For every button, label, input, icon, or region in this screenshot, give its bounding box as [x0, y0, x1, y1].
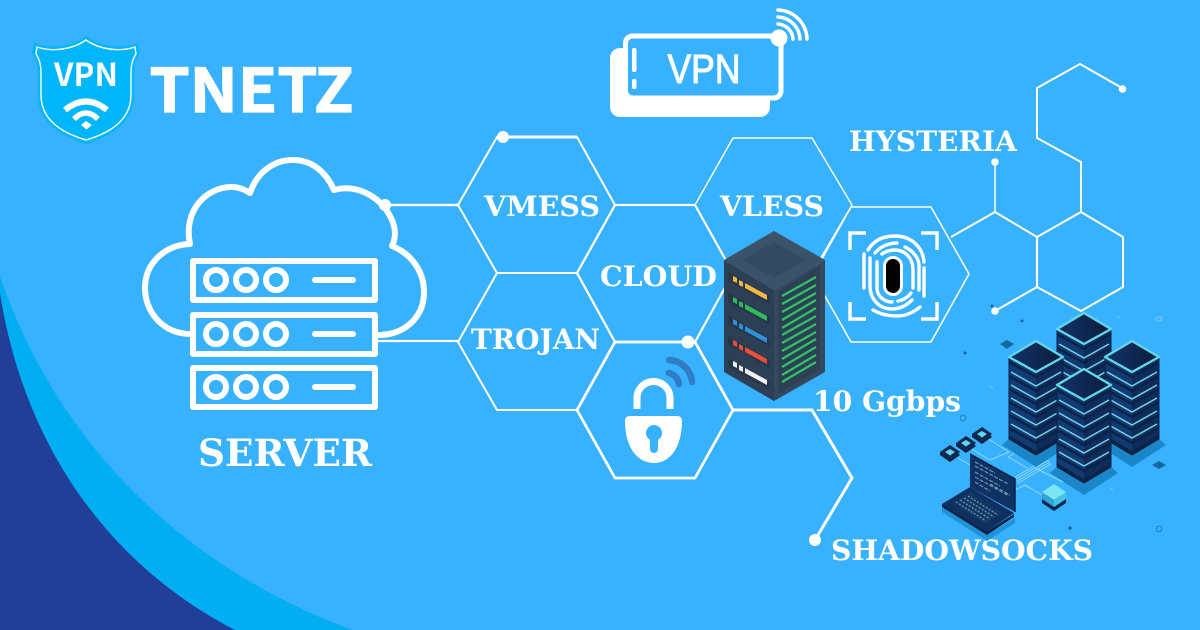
connector: server to VMESS	[385, 204, 458, 206]
isometric data center	[940, 304, 1166, 541]
rack drive rows	[728, 272, 770, 390]
label: SERVER: SERVER	[198, 431, 372, 475]
corner curve: light	[0, 277, 352, 630]
hexagon network	[378, 64, 1123, 540]
icon: lock	[625, 360, 692, 463]
connector: VMESS top	[503, 136, 577, 138]
icon: VPN badge	[610, 10, 807, 117]
cloud outline	[145, 160, 424, 335]
chips	[940, 427, 992, 462]
hex: VMESS	[458, 137, 615, 273]
connector: shadowsocks	[733, 410, 852, 540]
faint circuit lines	[958, 438, 1063, 495]
label: VMESS: VMESS	[483, 190, 600, 223]
rack vent lines	[782, 277, 816, 382]
label: 10 Ggbps: 10 Ggbps	[813, 385, 961, 418]
logo: shield	[32, 36, 140, 144]
hex: VLESS	[695, 138, 852, 273]
icon: cloud servers	[145, 160, 424, 407]
label: SHADOWSOCKS: SHADOWSOCKS	[831, 534, 1093, 567]
center server rack	[724, 231, 825, 401]
label: HYSTERIA: HYSTERIA	[849, 125, 1018, 158]
laptop	[942, 454, 1015, 541]
tower right	[1098, 341, 1166, 467]
connector: server to TROJAN	[378, 340, 458, 342]
hex: lock	[577, 342, 733, 478]
tower left	[1002, 341, 1070, 467]
hex: fingerprint	[813, 207, 969, 342]
tower back	[1050, 313, 1118, 439]
label: VLESS: VLESS	[719, 190, 824, 223]
connector: upper chain	[1037, 64, 1122, 212]
connector: hysteria branch	[951, 212, 1123, 311]
server unit 1	[193, 261, 375, 300]
hex: TROJAN	[458, 273, 615, 410]
label: TROJAN: TROJAN	[471, 323, 600, 356]
logo: shield: VPN	[53, 50, 118, 96]
tower front	[1050, 369, 1118, 495]
connector: hexagon inner edge	[1036, 237, 1038, 287]
logo: wordmark: TNETZ	[150, 43, 354, 130]
server unit 3	[193, 368, 375, 407]
hex: CLOUD	[577, 205, 733, 342]
connector: dot branch	[994, 162, 996, 212]
corner curve: dark	[0, 293, 235, 630]
server unit 2	[193, 315, 375, 354]
small cube	[1042, 484, 1066, 511]
icon: fingerprint	[850, 233, 937, 319]
icon: VPN badge: VPN	[668, 46, 740, 92]
connector dots	[379, 85, 1126, 546]
label: CLOUD: CLOUD	[600, 260, 717, 293]
small decorative marks	[964, 304, 1166, 530]
